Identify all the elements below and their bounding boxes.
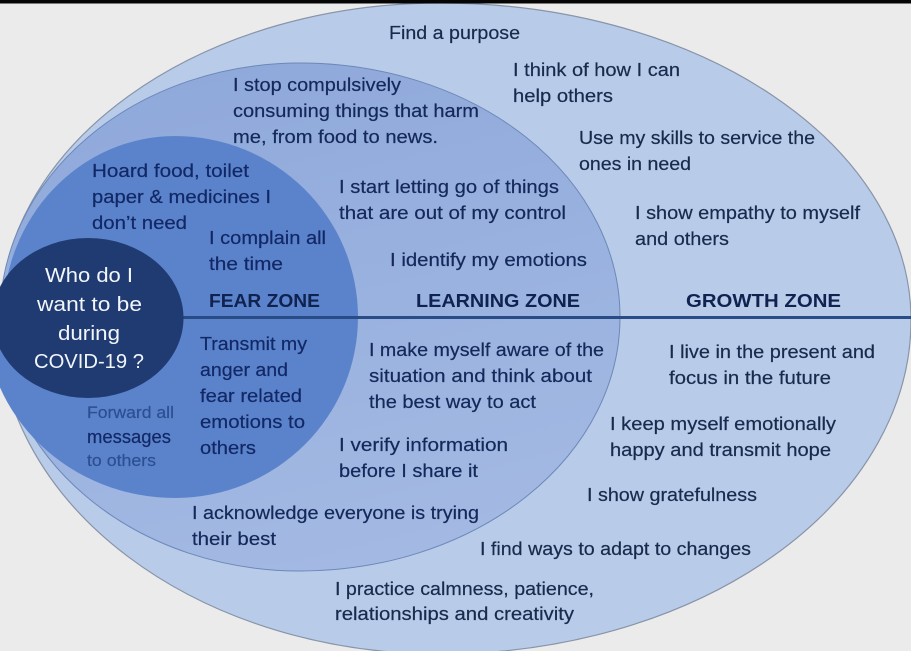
text: identify emotions: I identify my emotions xyxy=(390,250,587,270)
text: live in the present: I live in the present and xyxy=(669,342,875,362)
text: who do I want to be: want to be xyxy=(36,294,142,316)
text: complain xyxy=(209,228,326,274)
text: use my skills: Use my skills to service the xyxy=(579,128,815,148)
text: emotionally happy: I keep myself emotionally xyxy=(610,414,836,434)
panel: fear zone ellipse xyxy=(0,136,358,498)
text: hoard food xyxy=(92,161,271,233)
text: hoard food: don’t need xyxy=(92,213,187,233)
text: acknowledge everyone xyxy=(192,503,479,549)
top black bar xyxy=(0,0,911,4)
text: practice calmness xyxy=(335,579,594,624)
text: who do I want to be: COVID-19 ? xyxy=(34,351,144,373)
text: live in the present xyxy=(669,342,875,388)
text: hoard food: Hoard food, toilet xyxy=(92,161,249,181)
text: make myself aware xyxy=(369,340,604,412)
text: who do I want to be: Who do I xyxy=(45,265,133,287)
panel: learning zone ellipse xyxy=(0,63,620,571)
text: transmit anger: emotions to xyxy=(200,412,305,432)
text: letting go: that are out of my control xyxy=(339,203,566,223)
text: show empathy: I show empathy to myself xyxy=(635,203,861,223)
text: forward messages: messages xyxy=(87,427,171,447)
heading: learning zone: LEARNING ZONE xyxy=(416,290,580,311)
text: who do I want to be: during xyxy=(58,323,120,345)
text: transmit anger xyxy=(200,334,307,458)
text: forward messages: to others xyxy=(87,452,156,470)
text: gratefulness: I show gratefulness xyxy=(587,485,757,505)
text: complain: the time xyxy=(209,254,283,274)
text: acknowledge everyone: I acknowledge everyone is trying xyxy=(192,503,479,523)
text: forward messages: Forward all xyxy=(87,404,174,422)
text: verify information: I verify information xyxy=(339,435,508,455)
text: letting go: I start letting go of things xyxy=(339,177,559,197)
text: find a purpose: Find a purpose xyxy=(389,23,520,43)
text: practice calmness: relationships and creativity xyxy=(335,604,574,624)
text: stop compulsively: me, from food to news. xyxy=(233,127,438,147)
text: who do I want to be xyxy=(34,265,144,373)
divider line xyxy=(183,316,911,319)
text: letting go xyxy=(339,177,566,223)
text: make myself aware: the best way to act xyxy=(369,392,536,412)
text: show empathy xyxy=(635,203,861,249)
text: stop compulsively xyxy=(233,75,479,147)
text: help others: I think of how I can xyxy=(513,60,680,80)
text: help others: help others xyxy=(513,86,613,106)
text: show empathy: and others xyxy=(635,229,729,249)
text: stop compulsively: I stop compulsively xyxy=(233,75,401,95)
heading: growth zone: GROWTH ZONE xyxy=(686,290,841,311)
text: verify information xyxy=(339,435,508,481)
text: use my skills xyxy=(579,128,815,174)
text: practice calmness: I practice calmness, patience, xyxy=(335,579,594,599)
text: transmit anger: Transmit my xyxy=(200,334,307,354)
text: use my skills: ones in need xyxy=(579,154,691,174)
text: emotionally happy: happy and transmit hope xyxy=(610,440,831,460)
text: transmit anger: others xyxy=(200,438,256,458)
text: transmit anger: fear related xyxy=(200,386,302,406)
text: acknowledge everyone: their best xyxy=(192,529,276,549)
text: forward messages xyxy=(87,404,174,470)
text: transmit anger: anger and xyxy=(200,360,288,380)
text: hoard food: paper & medicines I xyxy=(92,187,271,207)
text: stop compulsively: consuming things that harm xyxy=(233,101,479,121)
text: adapt to changes: I find ways to adapt to changes xyxy=(480,539,751,559)
text: verify information: before I share it xyxy=(339,461,478,481)
text: make myself aware: I make myself aware of the xyxy=(369,340,604,360)
panel: central question xyxy=(0,238,184,398)
text: live in the present: focus in the future xyxy=(669,368,831,388)
text: complain: I complain all xyxy=(209,228,326,248)
text: help others xyxy=(513,60,680,106)
heading: fear zone: FEAR ZONE xyxy=(209,290,320,311)
text: make myself aware: situation and think about xyxy=(369,366,592,386)
text: emotionally happy xyxy=(610,414,836,460)
